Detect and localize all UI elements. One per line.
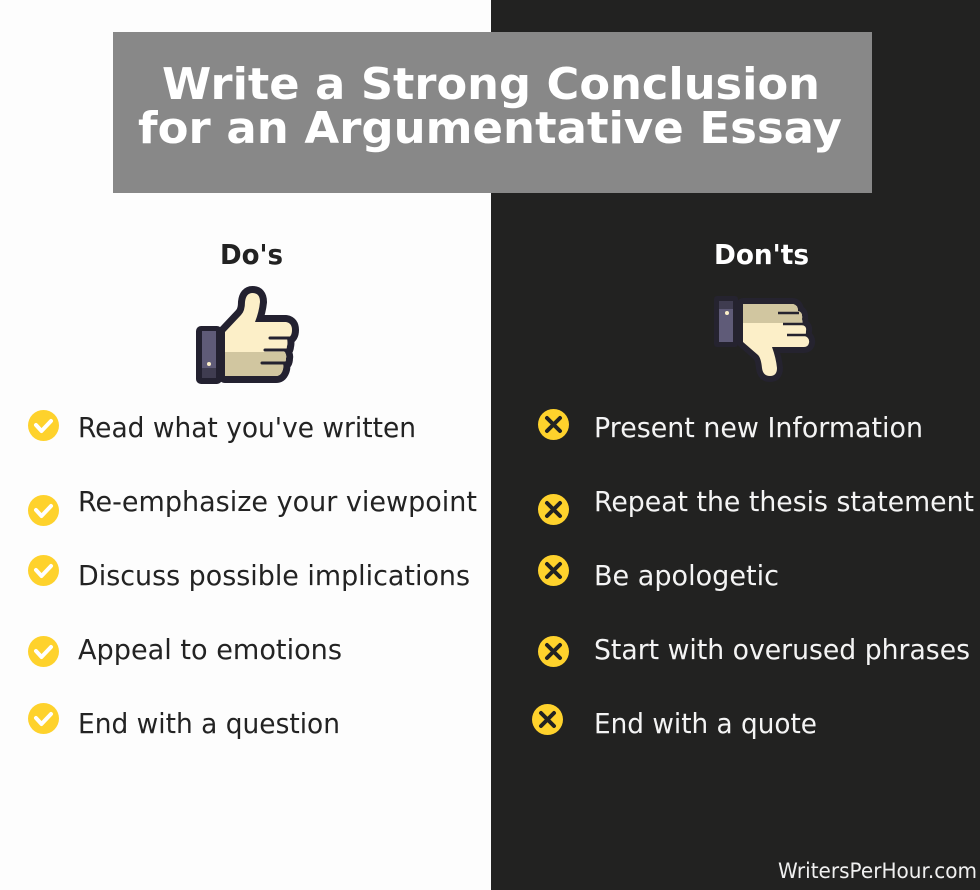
panel: don'ts list xyxy=(532,409,974,740)
item: end with a question: End with a question xyxy=(78,708,340,740)
item: end with a quote xyxy=(532,704,817,740)
item: read what you've written: Read what you've written xyxy=(78,412,416,444)
item: re-emphasize your viewpoint: Re-emphasize your viewpoint xyxy=(78,486,477,518)
item: discuss possible implications: Discuss possible implications xyxy=(78,560,470,592)
item: repeat the thesis statement: Repeat the thesis statement xyxy=(594,486,974,518)
icon: thumbs up xyxy=(196,293,292,384)
title banner: Write a Strong Conclusion xyxy=(162,59,820,110)
item: be apologetic: Be apologetic xyxy=(594,560,779,592)
item: be apologetic xyxy=(538,555,779,592)
item: end with a quote: End with a quote xyxy=(594,708,817,740)
icon: thumbs down xyxy=(714,296,809,376)
title banner: for an Argumentative Essay xyxy=(138,103,842,154)
item: appeal to emotions: Appeal to emotions xyxy=(78,634,342,666)
item: present new information: Present new Information xyxy=(594,412,923,444)
title banner xyxy=(113,32,872,193)
panel: do's list xyxy=(28,410,477,740)
heading: Don'ts: Don'ts xyxy=(714,238,809,271)
heading: Do's: Do's xyxy=(220,238,283,271)
item: start with overused phrases: Start with overused phrases xyxy=(594,634,970,666)
